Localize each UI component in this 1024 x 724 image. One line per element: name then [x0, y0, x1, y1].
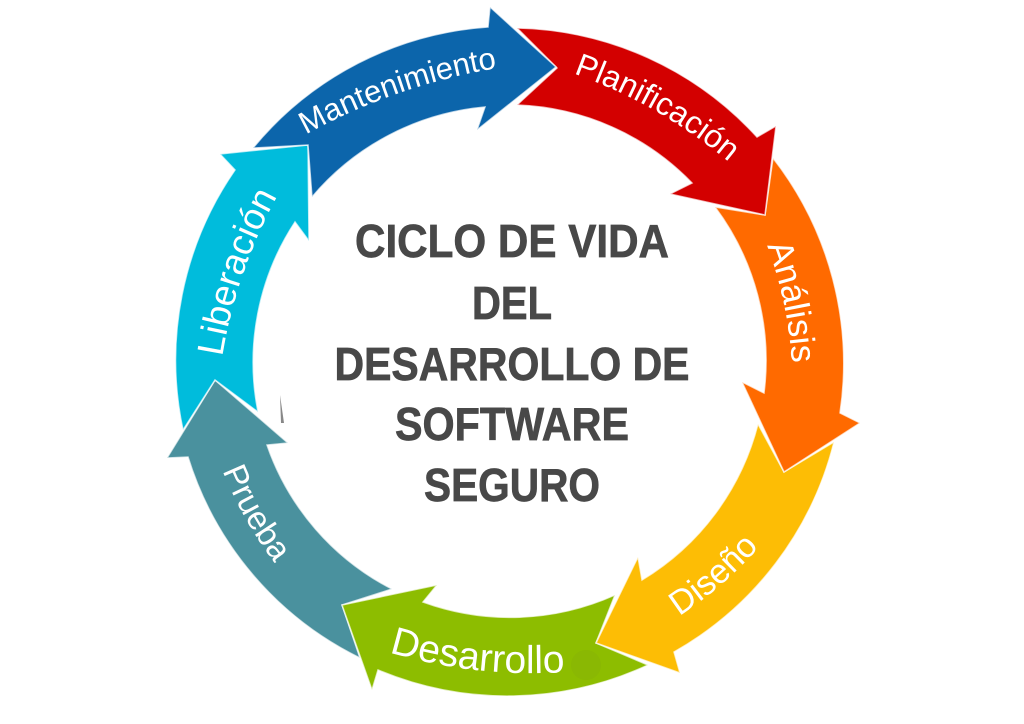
label: Desarrollo: Desarrollo	[392, 627, 563, 674]
title: central heading: SEGURO	[424, 459, 600, 511]
label: Prueba: Prueba	[224, 464, 286, 564]
title: central heading: SOFTWARE	[395, 398, 629, 450]
title: central heading: DEL	[472, 277, 552, 329]
arrow: Desarrollo	[342, 585, 648, 696]
arrow: Diseño	[596, 424, 834, 673]
title: central heading	[334, 215, 690, 511]
decorative spot on the Desarrollo arrow	[571, 650, 601, 680]
label: Planificación: Planificación	[576, 54, 736, 161]
label: Diseño: Diseño	[668, 538, 756, 615]
arrow: Prueba	[167, 380, 392, 658]
label: Liberación: Liberación	[198, 190, 276, 354]
label: Análisis: Análisis	[767, 246, 816, 362]
arrow: Liberación	[176, 145, 309, 430]
arrow: Planificación	[517, 28, 776, 215]
arrow: Análisis	[715, 158, 860, 472]
decorative sliver near the Prueba arrow	[280, 395, 284, 423]
title: central heading: CICLO DE VIDA	[355, 215, 669, 267]
label: Mantenimiento: Mantenimiento	[298, 52, 495, 134]
title: central heading: DESARROLLO DE	[334, 338, 690, 390]
arrow: Mantenimiento	[253, 7, 556, 197]
